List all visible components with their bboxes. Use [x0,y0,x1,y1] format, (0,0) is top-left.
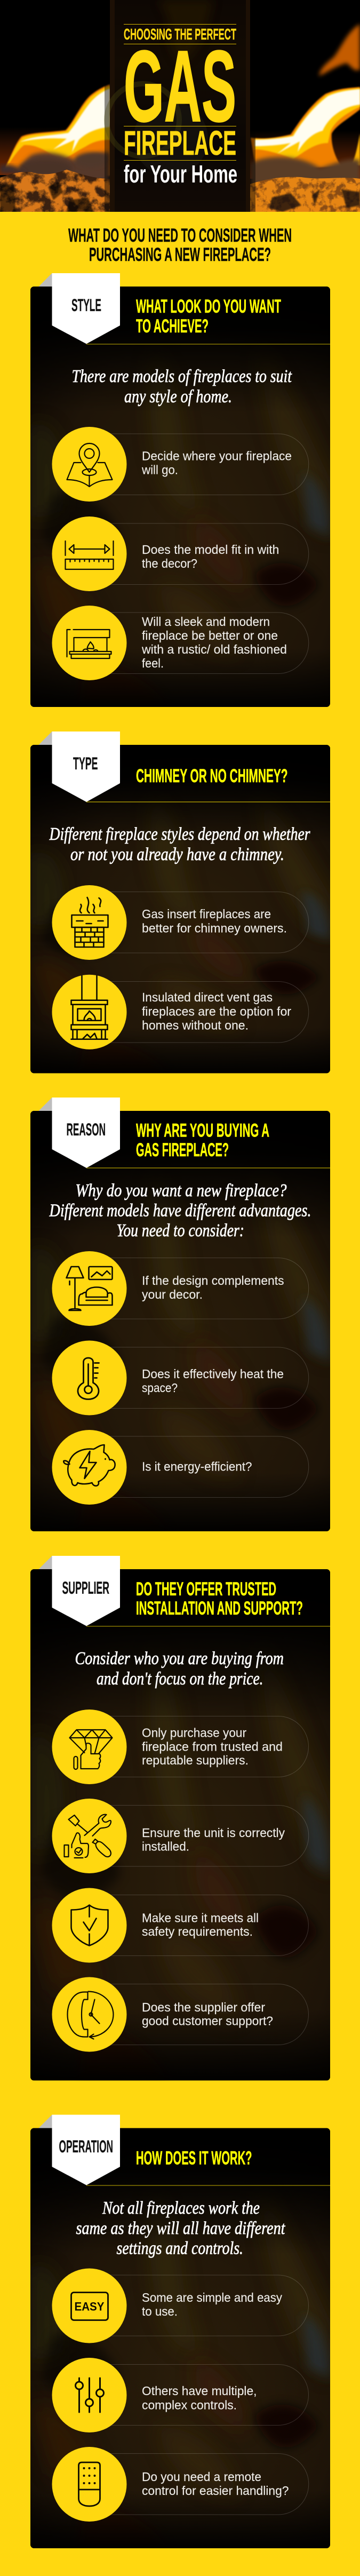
row: easy: to use. [142,2304,178,2318]
row: heat [52,1340,309,1415]
row: easy: Some are simple and easy [142,2291,282,2304]
row: safety [52,1888,308,1962]
row: safety: Make sure it meets all [142,1911,259,1925]
row: safety: safety requirements. [142,1925,253,1938]
row: support [52,1977,308,2052]
intro text [75,1649,284,1689]
icon: phone and clock [67,1991,113,2039]
row: fireplace style: with a rustic/ old fashioned [141,642,287,656]
row: energy: Is it energy-efficient? [142,1460,252,1474]
panel: operation [30,2115,330,2549]
row: decor [52,1251,309,1326]
intro text [76,2198,286,2258]
ribbon: type: TYPE [73,754,98,773]
icon: modern fireplace [67,630,111,658]
intro text: any style of home. [124,387,232,407]
icon: diamond and thumb [69,1730,112,1769]
icon: remote control [79,2462,100,2506]
intro text [49,824,310,864]
icon: thermometer [78,1358,99,1399]
heading: how does it work: HOW DOES IT WORK? [136,2148,252,2168]
intro text [49,1181,311,1241]
panel: reason [30,1098,330,1532]
row: chimney: better for chimney owners. [142,921,287,935]
row: controls: complex controls. [142,2398,237,2412]
icon: vented stove [71,976,108,1039]
ribbon: operation: OPERATION [59,2137,113,2156]
row: trusted suppliers [52,1710,308,1784]
icon: chimney [71,897,108,947]
ribbon: supplier [38,1556,120,1626]
icon: map pin [67,443,112,487]
heading: what look [136,296,281,337]
row: decor: your decor. [142,1287,203,1301]
row: remote: Do you need a remote [142,2470,261,2484]
icon: ruler [65,541,113,569]
row: support: good customer support? [142,2014,273,2028]
ribbon: supplier: SUPPLIER [62,1578,109,1597]
icon: lamp and sofa [66,1267,112,1310]
icon: piggy bank with bolt [63,1445,115,1486]
heading: why buying: WHY ARE YOU BUYING A [136,1120,269,1141]
row: direct vent: fireplaces are the option for [142,1004,291,1018]
row: support: Does the supplier offer [142,2000,265,2014]
hero photo panel [0,0,360,212]
icon: shield [71,1905,108,1945]
icon: easy label: EASY [75,2300,105,2313]
intro text [71,367,292,407]
row: controls [52,2358,308,2432]
translucent panel edges [105,0,110,212]
row: trusted suppliers: fireplace from trusted and [142,1739,283,1753]
row: measure: the decor? [142,556,197,570]
ribbon: reason [38,1098,120,1168]
row: measure: Does the model fit in with [142,543,279,556]
center dark panel [110,0,250,212]
intro text: same as they will all have different [76,2219,286,2238]
intro text: and don't focus on the price. [97,1669,263,1689]
row: location: Decide where your fireplace [142,449,292,463]
row: direct vent: Insulated direct vent gas [142,990,273,1004]
title line: choosing the perfect: CHOOSING THE PERFECT [124,26,236,43]
main question heading [68,225,292,265]
row: decor: If the design complements [142,1274,284,1287]
row: remote [52,2447,309,2522]
intro text: Consider who you are buying from [75,1649,284,1668]
ribbon: reason: REASON [66,1120,106,1139]
row: trusted suppliers: reputable suppliers. [142,1753,249,1767]
intro text: settings and controls. [116,2239,243,2258]
ribbon: operation [38,2115,120,2185]
icon: easy label [71,2292,108,2320]
intro text: Different models have different advantages. [49,1200,311,1221]
row: fireplace style: Will a sleek and modern [142,615,270,629]
panel: type [30,732,330,1074]
row: direct vent: homes without one. [142,1018,249,1032]
row: direct vent [52,975,309,1050]
ribbon: style: STYLE [71,296,101,315]
intro text: Why do you want a new fireplace? [76,1181,287,1200]
ribbon: type [38,732,120,802]
row: installation: Ensure the unit is correctly [142,1826,285,1840]
row: heat: Does it effectively heat the [142,1367,284,1381]
icon: tools and thumb [64,1815,111,1858]
row: trusted suppliers: Only purchase your [142,1726,246,1739]
panel: style [30,273,330,708]
panel: supplier [30,1556,330,2082]
row: remote: control for easier handling? [142,2484,289,2498]
title line: gas: GAS [124,30,236,143]
heading: trusted installation [136,1579,303,1619]
row: fireplace style [52,606,309,680]
title line: fireplace: FIREPLACE [124,124,236,162]
hero title [124,25,237,188]
row: fireplace style: feel. [142,656,164,670]
title line: for your home: for Your Home [124,160,237,188]
heading: what look: TO ACHIEVE? [136,316,209,337]
intro text: You need to consider: [116,1221,244,1241]
intro text: There are models of fireplaces to suit [71,367,292,386]
left flame and coals [0,84,110,212]
row: location: will go. [141,463,178,477]
row: controls: Others have multiple, [142,2384,257,2398]
heading: why buying: GAS FIREPLACE? [136,1140,229,1160]
row: installation [52,1799,309,1873]
ribbon: style [38,273,120,344]
icon: sliders [76,2378,103,2412]
row: chimney [52,885,309,960]
heading: why buying [136,1120,269,1160]
row: fireplace style: fireplace be better or one [142,629,278,642]
row: chimney: Gas insert fireplaces are [142,907,271,921]
intro text: or not you already have a chimney. [70,845,284,864]
row: heat: space? [142,1381,178,1395]
row: easy [52,2269,308,2343]
intro text: Not all fireplaces work the [102,2198,260,2218]
row: energy [52,1430,309,1505]
row: installation: installed. [142,1840,189,1854]
row: measure [52,516,309,591]
row: location [52,427,309,502]
right flame and coals [250,24,360,212]
